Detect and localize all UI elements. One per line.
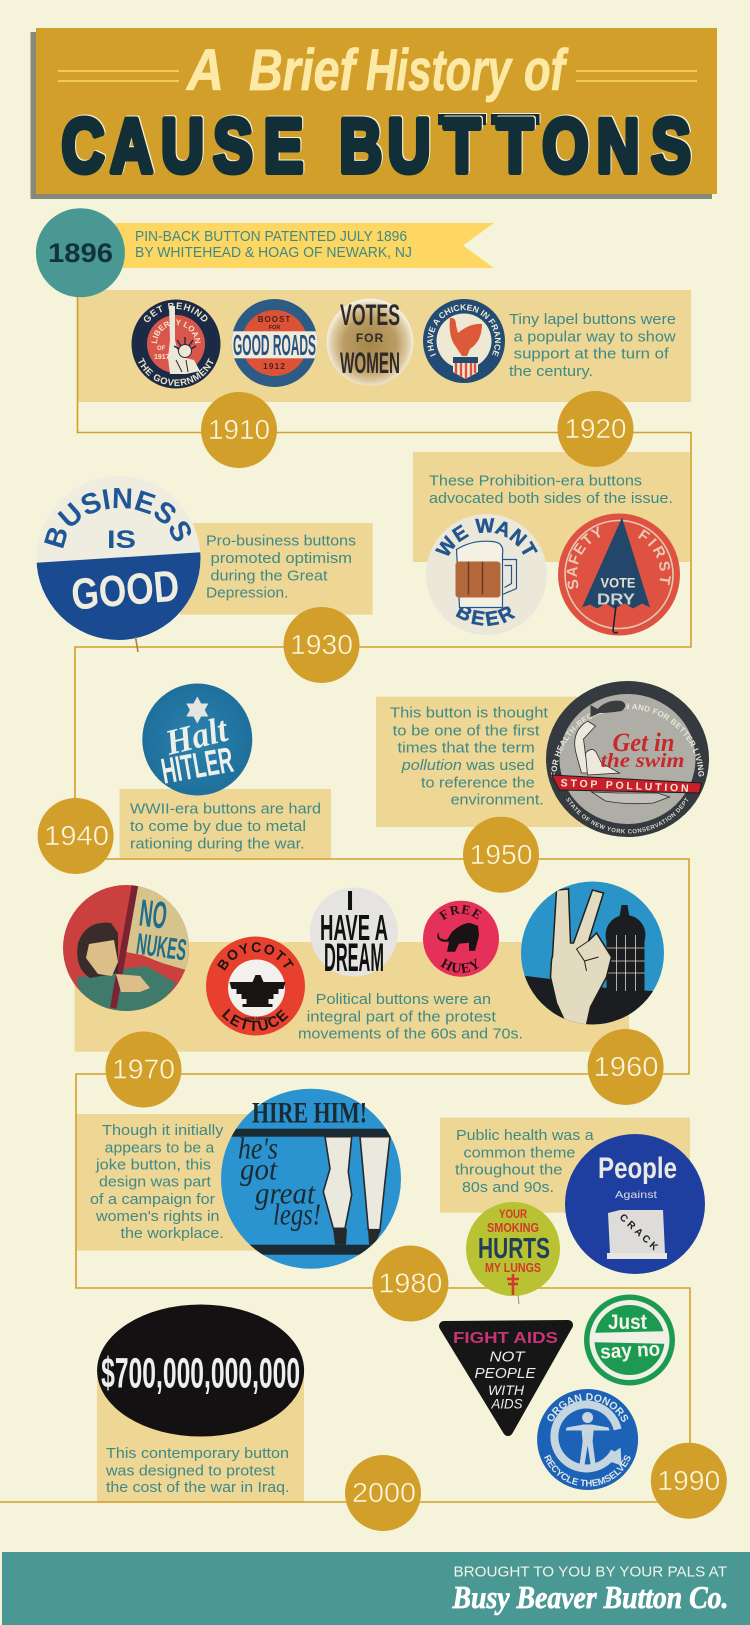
button: Free Huey: HUEY (440, 958, 479, 974)
text block: public health: throughout the (455, 1162, 562, 1179)
year marker: 1970 (106, 1032, 182, 1108)
button: Free Huey (423, 900, 499, 977)
button: Just Say No: say no (600, 1338, 661, 1364)
text block: pro-business: Pro-business buttons (206, 533, 356, 550)
button: People Against Crack: CRACK (617, 1212, 662, 1255)
heading: A Brief History of (185, 38, 569, 103)
button: $700,000,000,000 (97, 1304, 304, 1436)
panel: pollution background (376, 697, 596, 827)
panel: contemporary background (97, 1370, 304, 1503)
button: Free Huey: FREE (438, 904, 482, 920)
button: Organ Donors: ORGAN DONORS (547, 1393, 628, 1422)
text block: pollution (390, 705, 549, 809)
banner ribbon: 1896 patent: PIN-BACK BUTTON PATENTED JULY 1896 (135, 229, 407, 245)
heading: A Brief History of: of (524, 38, 569, 103)
text block: lapel buttons: Tiny lapel buttons were (509, 311, 676, 328)
year marker: 2000: 2000 (352, 1477, 416, 1508)
year marker: 1940: 1940 (44, 820, 109, 851)
button: Votes for Women: VOTES (340, 299, 400, 332)
button: Just Say No: Just (608, 1311, 647, 1334)
button: Halt Hitler (142, 684, 252, 796)
button: Get Behind the Government: OF (157, 346, 166, 352)
heading: Cause Buttons: CAUSE BUTTONS (63, 103, 692, 188)
button: Peace Sign (521, 882, 664, 1024)
button: Business is Good: GOOD (69, 561, 181, 620)
text block: public health: Public health was a (456, 1127, 594, 1144)
year marker: 1920: 1920 (564, 413, 626, 444)
button: Boycott Lettuce: BOYCOTT (217, 942, 294, 971)
button: I Have a Chicken in France (423, 299, 505, 383)
text block: protest movements: movements of the 60s and 70s. (298, 1026, 523, 1043)
button: I Have a Dream: DREAM (324, 936, 384, 980)
text block: prohibition: advocated both sides of the issue. (429, 490, 673, 507)
text block: pro-business: during the Great (210, 567, 328, 584)
button: Your Smoking Hurts My Lungs: HURTS (478, 1233, 550, 1265)
button: Halt Hitler: Halt (161, 709, 232, 763)
text block: workplace: of a campaign for (90, 1191, 215, 1208)
heading: A Brief History of: A (185, 38, 224, 103)
button: Hire Him: HIRE HIM! (252, 1097, 367, 1130)
year marker: 1990: 1990 (657, 1465, 720, 1496)
text block: contemporary (105, 1445, 289, 1496)
text block: pollution: to reference the (421, 774, 535, 791)
text block: workplace: appears to be a (105, 1139, 215, 1156)
button: Get in the Swim Stop Pollution (546, 681, 709, 837)
timeline line (0, 295, 691, 1502)
text block: pollution: environment. (451, 792, 544, 809)
heading: Cause Buttons: CAUSE BUTTONS (62, 104, 691, 189)
text block: WWII: to come by due to metal (130, 818, 306, 835)
button: No Nukes: NO (137, 893, 169, 938)
button: Boycott Lettuce: LETTUCE (222, 1008, 288, 1031)
button: Hire Him: legs! (273, 1197, 321, 1232)
button: Organ Donors (537, 1389, 638, 1490)
text block: protest movements (298, 991, 523, 1043)
button: Business is Good: BUSINESS (44, 488, 192, 548)
text block: lapel buttons: the century. (509, 363, 593, 380)
banner ribbon: 1896 patent (115, 223, 494, 268)
button: Safety First Vote Dry: DRY (597, 592, 635, 608)
button: People Against Crack: Against (615, 1189, 657, 1201)
text block: protest movements: integral part of the protest (307, 1008, 497, 1025)
year marker: 1980 (372, 1246, 448, 1322)
text block: workplace: women's rights in (95, 1208, 220, 1225)
year marker: 1910 (201, 392, 277, 468)
button: Get Behind the Government: THE GOVERNMENT (138, 358, 214, 386)
text block: prohibition (429, 473, 673, 507)
year marker: 1930 (284, 607, 360, 683)
button: Get Behind the Government: GET BEHIND (144, 302, 208, 322)
button: Your Smoking Hurts My Lungs: MY LUNGS (485, 1260, 541, 1275)
button: Votes for Women (326, 298, 414, 386)
button: Fight AIDS: WITH (488, 1383, 524, 1398)
panel: title banner (30, 28, 717, 199)
button: Fight AIDS: FIGHT AIDS (453, 1330, 558, 1347)
year marker: 1960: 1960 (594, 1051, 658, 1082)
year marker: 1980: 1980 (378, 1268, 442, 1298)
panel: pro-business background (180, 523, 373, 615)
button: Organ Donors: RECYCLE THEMSELVES (544, 1454, 630, 1486)
button: Fight AIDS: NOT (490, 1349, 527, 1366)
badge: 1896: 1896 (48, 238, 113, 268)
panel: lapel buttons background (78, 290, 691, 402)
button: No Nukes (63, 885, 191, 1013)
text block: workplace: the workplace. (120, 1225, 224, 1242)
year marker: 1950 (463, 817, 539, 893)
button: People Against Crack (565, 1134, 705, 1274)
button: Votes for Women: WOMEN (340, 347, 400, 380)
button: We Want Beer: BEER (456, 606, 516, 626)
heading: A Brief History of: Brief (249, 38, 360, 103)
text block: workplace: joke button, this (95, 1156, 211, 1173)
text block: pro-business (206, 533, 356, 602)
banner ribbon: 1896 patent: BY WHITEHEAD & HOAG OF NEWARK, NJ (135, 245, 412, 261)
button: Your Smoking Hurts My Lungs: SMOKING (487, 1220, 539, 1235)
panel: workplace background (76, 1114, 276, 1251)
button: Get in the Swim Stop Pollution: STATE OF NEW YORK CONSERVATION DEPT (566, 797, 688, 834)
button: Boost for Good Roads: BOOST (258, 315, 291, 324)
year marker: 1990 (651, 1443, 727, 1519)
text block: WWII (130, 801, 321, 852)
panel: WWII background (120, 789, 331, 859)
button: Safety First Vote Dry (558, 514, 680, 636)
text block: public health: 80s and 90s. (462, 1179, 554, 1196)
heading: A Brief History of: History (366, 38, 513, 103)
button: People Against Crack: People (598, 1152, 677, 1185)
text block: pro-business: promoted optimism (210, 550, 352, 567)
button: Your Smoking Hurts My Lungs: YOUR (499, 1207, 527, 1221)
text block: contemporary: was designed to protest (105, 1462, 276, 1479)
year marker: 2000 (345, 1455, 421, 1531)
button: Boycott Lettuce: NON-UNION (244, 1016, 270, 1021)
button: Get in the Swim Stop Pollution: FOR HEALTH-RECREATION AND FOR BETTER LIVING (551, 703, 704, 777)
badge: 1896 (36, 208, 125, 297)
text block: workplace: design was part (99, 1174, 212, 1191)
text block: WWII: WWII-era buttons are hard (130, 801, 321, 818)
text block: pollution: This button is thought (390, 705, 549, 722)
text block: contemporary: the cost of the war in Iraq. (106, 1479, 289, 1496)
button: Boost for Good Roads (232, 299, 318, 387)
footer: BROUGHT TO YOU BY YOUR PALS AT (454, 1564, 727, 1581)
button: Safety First Vote Dry: FIRST (638, 529, 671, 586)
text block: public health: common theme (464, 1144, 575, 1161)
text block: protest movements: Political buttons were an (316, 991, 491, 1008)
button: Get Behind the Government: LIBERTY LOAN (152, 319, 201, 344)
year marker: 1960 (588, 1029, 664, 1105)
year marker: 1930: 1930 (290, 629, 353, 660)
text: GOOD ROADS (233, 330, 316, 362)
text block: workplace: Though it initially (102, 1122, 224, 1139)
button: $700,000,000,000: $700,000,000,000 (101, 1350, 300, 1398)
button: Just Say No (584, 1294, 675, 1386)
year marker: 1910: 1910 (208, 414, 270, 445)
button: Business is Good (36, 488, 200, 652)
panel: protest movements background (75, 942, 629, 1052)
button: Votes for Women: FOR (356, 331, 384, 345)
button: Boost for Good Roads: FOR (269, 325, 280, 331)
button: We Want Beer: WE WANT (434, 518, 538, 556)
button: No Nukes: NUKES (134, 928, 188, 967)
button: Safety First Vote Dry: SAFETY (566, 526, 600, 590)
text block: WWII: rationing during the war. (130, 835, 305, 852)
text block: lapel buttons: support at the turn of (514, 346, 670, 363)
button: Get Behind the Government: 1917 (154, 354, 170, 361)
button: Hire Him: great (255, 1176, 316, 1211)
button: Fight AIDS: AIDS (491, 1396, 522, 1412)
button: I Have a Dream: HAVE A (320, 907, 388, 948)
button: Your Smoking Hurts My Lungs (466, 1202, 560, 1304)
footer (2, 1552, 750, 1625)
button: I Have a Dream (310, 885, 398, 980)
button: Get Behind the Government (132, 300, 220, 388)
button: I Have a Dream: I (346, 885, 354, 916)
text block: contemporary: This contemporary button (106, 1445, 289, 1462)
button: Halt Hitler: HITLER (158, 739, 236, 792)
button: Get in the Swim Stop Pollution: the swim (600, 750, 684, 772)
text block: pro-business: Depression. (206, 585, 288, 602)
button: Business is Good: IS (107, 526, 136, 554)
button: Boost for Good Roads: 1912 (263, 361, 286, 371)
text block: pollution: to be one of the first (393, 722, 540, 739)
button: Safety First Vote Dry: VOTE (600, 574, 636, 590)
button: Hire Him (221, 1089, 401, 1269)
button: Fight AIDS: PEOPLE (474, 1365, 537, 1382)
button: Boycott Lettuce (206, 936, 305, 1036)
text block: public health (455, 1127, 594, 1196)
button: Hire Him: he's (238, 1131, 278, 1166)
text block: pollution: pollution was used (401, 757, 534, 774)
panel: prohibition background (413, 452, 690, 562)
button: Fight AIDS (444, 1325, 568, 1431)
year marker: 1940 (38, 798, 114, 874)
text block: prohibition: These Prohibition-era buttons (429, 473, 642, 490)
text block: lapel buttons (509, 311, 676, 380)
button: I Have a Chicken in France: I HAVE A CHICKEN IN FRANCE (427, 304, 501, 357)
button: Get in the Swim Stop Pollution: STOP POLLUTION (560, 777, 689, 795)
button: We Want Beer (426, 514, 547, 635)
year marker: 1970: 1970 (112, 1054, 175, 1084)
panel: public health background (440, 1118, 690, 1213)
year marker: 1920 (558, 391, 634, 467)
text block: pollution: times that the term (398, 740, 535, 757)
button: Get in the Swim Stop Pollution: Get in (612, 728, 674, 757)
year marker: 1950: 1950 (470, 839, 532, 870)
text block: workplace (90, 1122, 224, 1242)
text block: lapel buttons: a popular way to show (514, 328, 676, 345)
button: Hire Him: got (240, 1152, 278, 1187)
